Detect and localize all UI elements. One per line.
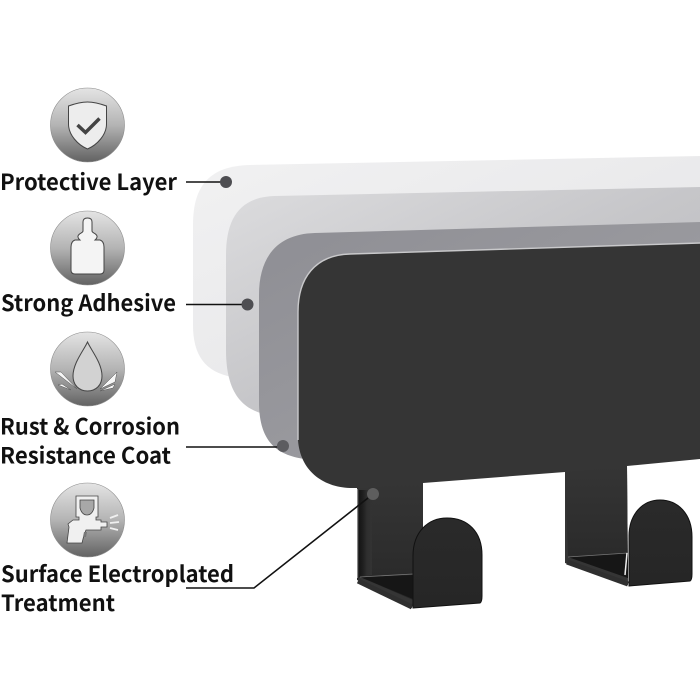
plate top highlight xyxy=(298,243,700,440)
heading: strong adhesive: Strong Adhesive xyxy=(1,286,176,318)
layer: strong adhesive xyxy=(226,187,700,414)
callout: rust coat leader xyxy=(186,440,289,452)
panel: layered hook diagram xyxy=(193,156,700,608)
hook 1 rim xyxy=(358,581,412,607)
callout: electroplated leader xyxy=(186,488,379,588)
icon: adhesive bottle xyxy=(50,211,124,285)
layer: protective layer xyxy=(193,156,700,377)
heading: rust and corrosion resistance coat: Resistance Coat xyxy=(0,438,172,470)
leg 1 left shadow xyxy=(359,490,372,577)
hook 2 rim xyxy=(567,562,628,584)
icon: water drop with splashes xyxy=(50,332,124,406)
layer: rust and corrosion resistance coat xyxy=(259,222,700,459)
heading: surface electroplated treatment xyxy=(1,557,234,618)
product: black two-hook rack xyxy=(298,243,700,608)
heading: protective layer: Protective Layer xyxy=(0,165,177,197)
heading: surface electroplated treatment: Surface Electroplated xyxy=(1,557,234,589)
heading: rust and corrosion resistance coat: Rust & Corrosion xyxy=(0,410,180,442)
hook 1 front xyxy=(413,518,482,608)
icon: spray gun xyxy=(50,483,124,557)
hook 1 floor edge xyxy=(360,574,413,577)
heading: rust and corrosion resistance coat xyxy=(0,410,180,470)
callout: strong adhesive leader xyxy=(186,298,254,310)
hook 2 floor edge xyxy=(568,553,628,557)
hook 2 highlight xyxy=(625,553,627,575)
rack plate and legs xyxy=(298,243,700,608)
icon: shield with check xyxy=(50,88,124,162)
leg 1 edge highlight xyxy=(356,489,358,578)
heading: surface electroplated treatment: Treatment xyxy=(1,586,116,618)
hook 2 floor xyxy=(568,553,628,578)
callout: protective layer leader xyxy=(186,176,232,188)
leg 1 shading xyxy=(357,483,423,600)
leg 2 shading xyxy=(565,466,628,578)
hook 1 floor xyxy=(360,575,413,599)
hook 2 front xyxy=(629,500,692,586)
